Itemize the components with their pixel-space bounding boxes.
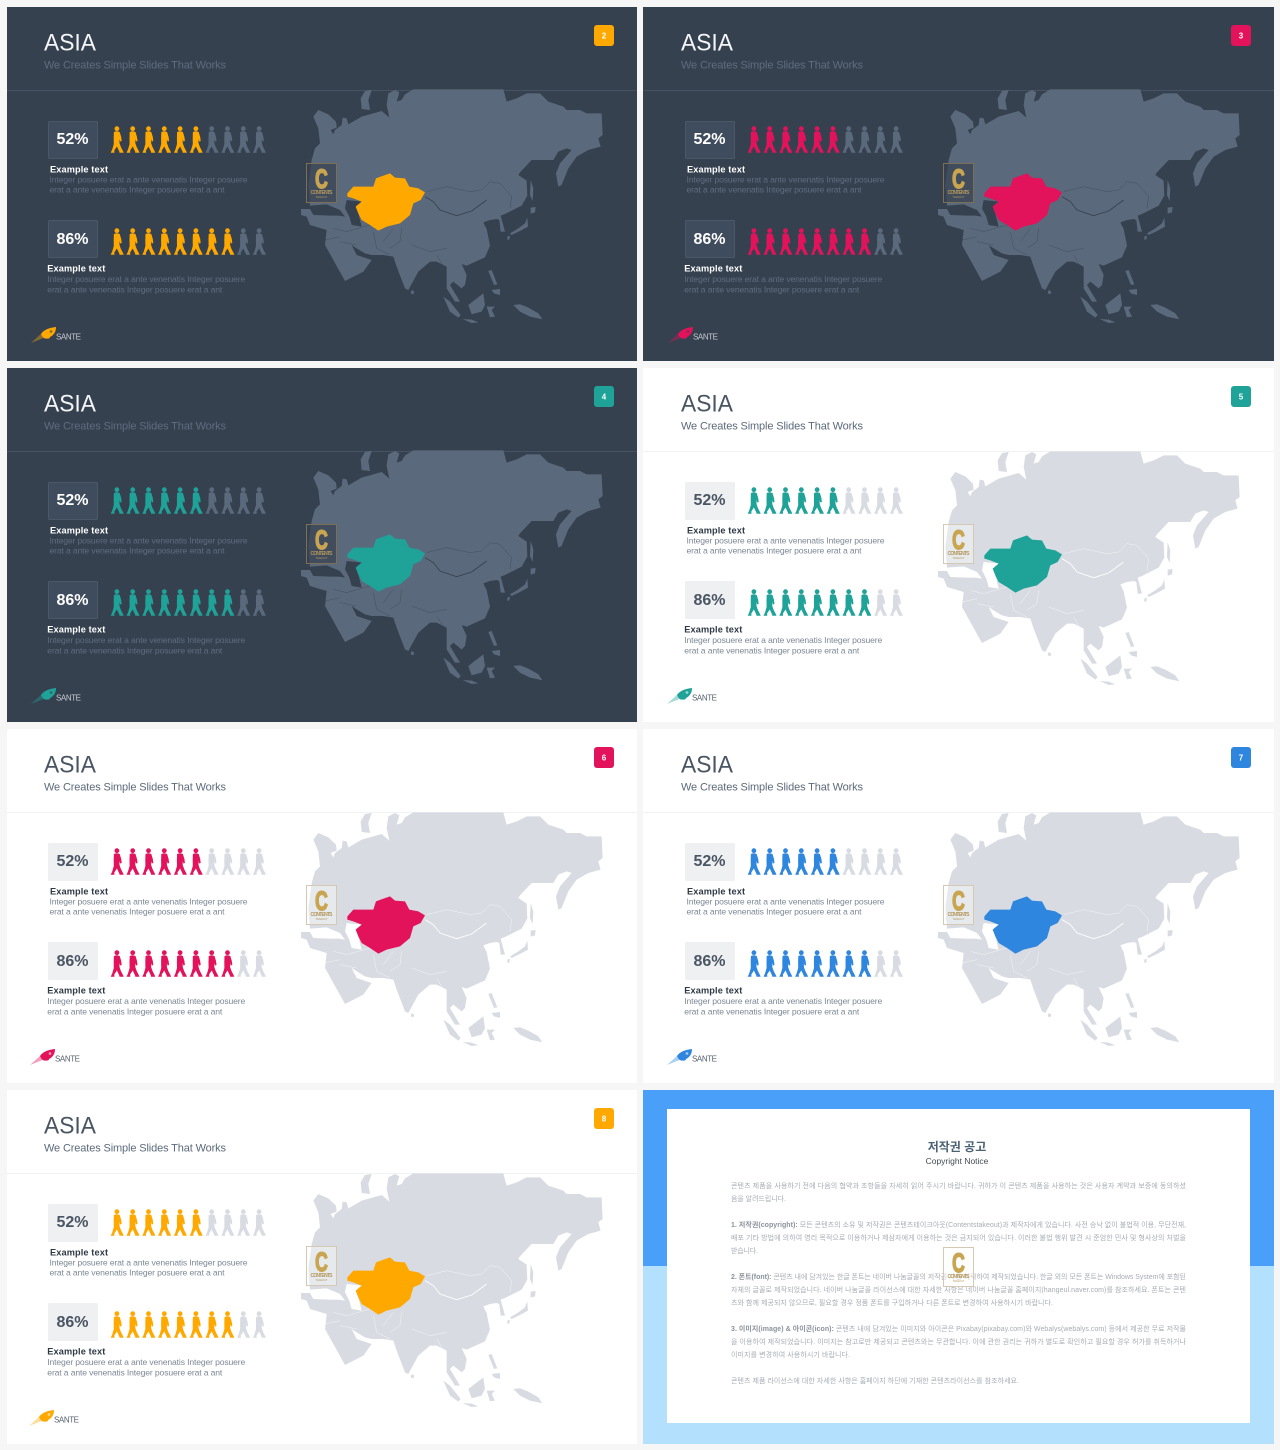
text block 1: Integer posuere erat a ante venenatis Integer posuere <box>50 536 248 546</box>
slide 4: dark teal <box>7 368 637 722</box>
text block 2: erat a ante venenatis Integer posuere erat a ant <box>47 645 223 655</box>
text block 1: Example text <box>50 886 108 896</box>
logo <box>667 688 717 704</box>
notice panel <box>667 1109 1250 1423</box>
page badge: 8 <box>602 1114 607 1124</box>
stat box 52% <box>686 122 734 158</box>
text block 1: erat a ante venenatis Integer posuere erat a ant <box>686 185 862 195</box>
text block 1: Integer posuere erat a ante venenatis Integer posuere <box>50 897 248 907</box>
text block 2: Example text <box>47 625 105 635</box>
stat box 86%: 86% <box>693 953 726 970</box>
slide 3: dark pink <box>643 7 1274 361</box>
map of Asia <box>301 1173 603 1407</box>
stat box 52%: 52% <box>56 1214 89 1231</box>
page badge <box>594 747 614 768</box>
subtitle: We Creates Simple Slides That Works <box>44 781 226 793</box>
stat box 86%: 86% <box>56 231 89 248</box>
text block 2: erat a ante venenatis Integer posuere erat a ant <box>47 284 223 294</box>
text block 2: Integer posuere erat a ante venenatis Integer posuere <box>47 635 246 645</box>
text block 1: Integer posuere erat a ante venenatis Integer posuere <box>686 897 885 907</box>
stat box 52%: 52% <box>56 492 89 509</box>
stat box 52% <box>48 482 98 520</box>
text block 2: erat a ante venenatis Integer posuere erat a ant <box>684 1006 860 1016</box>
watermark <box>944 524 974 564</box>
slide 8: light orange <box>7 1090 637 1444</box>
text block 2: Integer posuere erat a ante venenatis Integer posuere <box>684 996 883 1006</box>
watermark <box>944 885 974 924</box>
text block 2: Example text <box>47 264 105 274</box>
logo: SANTE <box>693 332 718 341</box>
map of Asia <box>938 812 1240 1046</box>
notice body text: 을 이용하여 제작되었습니다. 이미지는 참고로만 제공되고 콘텐츠와는 무관합니다. 이에 관한 권리는 귀하가 별도로 확인하고 필요할 경우 허가를 취득하거나 <box>731 1337 1187 1346</box>
page badge <box>1231 25 1251 46</box>
logo <box>31 688 81 704</box>
text block 1: erat a ante venenatis Integer posuere erat a ant <box>50 1268 225 1278</box>
stat box 52% <box>48 122 98 158</box>
stat box 86% <box>48 942 98 980</box>
stat box 86% <box>48 1304 98 1340</box>
pictogram 86% <box>748 589 903 616</box>
stat box 52% <box>48 844 98 880</box>
watermark <box>306 885 336 924</box>
pictogram 52% <box>111 848 266 875</box>
page badge: 5 <box>1239 392 1244 402</box>
text block 2: Example text <box>684 625 742 635</box>
text block 2: Integer posuere erat a ante venenatis Integer posuere <box>47 274 246 284</box>
text block 1: Example text <box>687 886 745 896</box>
subtitle: We Creates Simple Slides That Works <box>44 59 226 71</box>
page badge <box>594 386 614 407</box>
subtitle: We Creates Simple Slides That Works <box>681 781 864 793</box>
text block 2: erat a ante venenatis Integer posuere erat a ant <box>684 284 860 294</box>
stat box 52%: 52% <box>693 131 726 148</box>
notice body text: 이미지를 변경하여 사용하시기 바랍니다. <box>731 1350 850 1359</box>
logo <box>667 1049 717 1065</box>
watermark <box>306 524 336 564</box>
text block 2: erat a ante venenatis Integer posuere erat a ant <box>684 645 860 655</box>
notice body text: 콘텐츠 제품을 사용하기 전에 다음의 협약과 조항들을 자세히 읽어 주시기 바랍니다. 귀하가 이 콘텐츠 제품을 사용하는 것은 사용자 계약과 보증에 동의하셨 <box>731 1181 1187 1190</box>
stat box 86%: 86% <box>56 592 89 609</box>
text block 2: Integer posuere erat a ante venenatis Integer posuere <box>47 996 246 1006</box>
pictogram 52% <box>111 126 266 153</box>
text block 2 <box>47 1347 246 1377</box>
stat box 86%: 86% <box>693 231 726 248</box>
logo <box>31 327 81 343</box>
subtitle: We Creates Simple Slides That Works <box>44 420 226 432</box>
notice body text: 음을 알려드립니다. <box>731 1194 786 1203</box>
stat box 86%: 86% <box>56 953 89 970</box>
text block 1: Integer posuere erat a ante venenatis Integer posuere <box>50 1258 248 1268</box>
text block 1 <box>50 1247 248 1278</box>
stat box 86% <box>48 582 98 618</box>
text block 2 <box>47 986 246 1016</box>
notice body text: 받습니다. <box>731 1246 758 1255</box>
pictogram 52% <box>748 487 903 514</box>
text block 2 <box>684 625 883 655</box>
notice body text: 2. 폰트(font): 콘텐츠 내에 담겨있는 한글 폰트는 네이버 나눔글꼴의 저작권 사용 허락하여 제작되었습니다. 한글 외의 모든 폰트는 Windows System에 포함된 <box>731 1272 1186 1281</box>
page badge: 2 <box>602 32 607 40</box>
stat box 86% <box>686 582 734 618</box>
page badge <box>1231 747 1251 768</box>
pictogram 52% <box>748 848 903 875</box>
title: ASIA <box>44 752 96 778</box>
page badge <box>594 1108 614 1129</box>
subtitle: We Creates Simple Slides That Works <box>44 1142 226 1154</box>
stat box 86% <box>686 220 734 258</box>
logo: SANTE <box>56 332 81 341</box>
watermark <box>944 1247 974 1286</box>
title: ASIA <box>681 390 733 418</box>
text block 1 <box>50 164 248 195</box>
text block 1: erat a ante venenatis Integer posuere erat a ant <box>50 185 225 195</box>
pictogram 86% <box>748 950 903 977</box>
slide 9: copyright notice <box>643 1090 1274 1444</box>
text block 1: Example text <box>687 164 745 174</box>
slide 2: dark orange <box>7 7 637 361</box>
pictogram 52% <box>111 487 266 514</box>
notice heading: 저작권 공고 <box>928 1139 986 1154</box>
text block 1: Integer posuere erat a ante venenatis Integer posuere <box>50 175 248 185</box>
page badge: 7 <box>1239 754 1244 762</box>
pictogram 52% <box>111 1209 266 1236</box>
watermark <box>306 1246 336 1286</box>
notice body text: 츠와 함께 제공되지 않으므로, 필요할 경우 정품 폰트를 구입하거나 다른 폰트로 변경하여 사용하시기 바랍니다. <box>731 1298 1053 1307</box>
notice body text: 배포 기타 방법에 의하여 영리 목적으로 이용하거나 제삼자에게 이용하는 것은 금지되어 있습니다. 이러한 불법 행위 발견 시 준엄한 민사 및 형사상의 처벌을 <box>731 1233 1187 1242</box>
text block 1: Example text <box>50 164 108 174</box>
logo <box>668 327 718 343</box>
notice body text <box>731 1181 1187 1385</box>
text block 2: Example text <box>47 986 105 996</box>
text block 2: Integer posuere erat a ante venenatis Integer posuere <box>684 635 883 645</box>
subtitle: We Creates Simple Slides That Works <box>681 59 864 71</box>
title: ASIA <box>44 390 96 418</box>
stat box 86% <box>686 942 734 980</box>
text block 1: Integer posuere erat a ante venenatis Integer posuere <box>686 536 885 546</box>
logo: SANTE <box>692 693 717 702</box>
pictogram 86% <box>111 1311 266 1338</box>
page badge: 3 <box>1239 32 1244 40</box>
text block 2: Example text <box>684 264 742 274</box>
title: ASIA <box>44 1112 96 1140</box>
text block 1 <box>686 886 885 917</box>
map of Asia <box>938 451 1240 685</box>
pictogram 86% <box>748 228 903 255</box>
text block 1: Example text <box>50 1247 108 1257</box>
pictogram 86% <box>111 950 266 977</box>
map of Asia <box>301 450 603 684</box>
stat box 86% <box>48 220 98 258</box>
text block 2: Integer posuere erat a ante venenatis Integer posuere <box>47 1357 246 1367</box>
logo <box>29 1410 79 1426</box>
logo: SANTE <box>692 1054 717 1063</box>
text block 1: erat a ante venenatis Integer posuere erat a ant <box>686 907 862 917</box>
watermark <box>306 163 336 202</box>
page badge: 6 <box>602 754 607 762</box>
text block 2: Example text <box>684 986 742 996</box>
page badge <box>594 25 614 46</box>
text block 2 <box>47 264 246 294</box>
stat box 52%: 52% <box>56 853 89 870</box>
logo <box>30 1049 80 1065</box>
text block 1: Example text <box>687 525 745 535</box>
watermark <box>944 163 974 202</box>
text block 1: erat a ante venenatis Integer posuere erat a ant <box>50 907 225 917</box>
pictogram 86% <box>111 228 266 255</box>
text block 1 <box>50 886 248 917</box>
stat box 52% <box>48 1204 98 1242</box>
notice body text: 3. 이미지(image) & 아이콘(icon): 콘텐츠 내에 담겨있는 이미지와 아이콘은 Pixabay(pixabay.com)와 Webalys(webalys.com) 등에서 제공한 무료 저작물 <box>731 1324 1187 1333</box>
title: ASIA <box>44 30 96 56</box>
notice body text: 1. 저작권(copyright): 모든 콘텐츠의 소유 및 저작권은 콘텐츠테이크아웃(Contentstakeout)과 제작자에게 있습니다. 사전 승낙 없이 불법적 이용, 무단전재, <box>731 1220 1186 1229</box>
slide 7: light blue <box>643 729 1274 1083</box>
text block 2 <box>684 986 883 1016</box>
stat box 52%: 52% <box>56 131 89 148</box>
text block 1 <box>686 525 885 556</box>
text block 1 <box>686 164 885 195</box>
map of Asia <box>301 89 603 323</box>
text block 1: erat a ante venenatis Integer posuere erat a ant <box>686 546 862 556</box>
stat box 52% <box>686 482 734 520</box>
text block 1 <box>50 525 248 556</box>
subtitle: We Creates Simple Slides That Works <box>681 420 864 432</box>
notice body text: 자체의 글꼴로 제작되었습니다. 네이버 나눔글꼴 라이선스에 대한 자세한 사항은 네이버 나눔글꼴 홈페이지(hangeul.naver.com)를 참조하세요. 폰트는 콘텐 <box>731 1285 1186 1294</box>
text block 2: erat a ante venenatis Integer posuere erat a ant <box>47 1006 223 1016</box>
title: ASIA <box>681 30 733 56</box>
text block 1: erat a ante venenatis Integer posuere erat a ant <box>50 546 225 556</box>
map of Asia <box>301 812 603 1046</box>
text block 2: erat a ante venenatis Integer posuere erat a ant <box>47 1367 223 1377</box>
slide 6: light pink <box>7 729 637 1083</box>
logo: SANTE <box>54 1415 79 1424</box>
slide 5: light teal <box>643 368 1274 722</box>
notice subheading: Copyright Notice <box>926 1156 989 1166</box>
title: ASIA <box>681 752 733 778</box>
logo: SANTE <box>55 1054 80 1063</box>
page badge: 4 <box>602 392 607 402</box>
stat box 86%: 86% <box>693 592 726 609</box>
stat box 52%: 52% <box>693 853 726 870</box>
pictogram 52% <box>748 126 903 153</box>
notice body text: 콘텐츠 제품 라이선스에 대한 자세한 사항은 홈페이지 하단에 기재한 콘텐츠라이선스를 참조하세요. <box>731 1376 1019 1385</box>
text block 2: Integer posuere erat a ante venenatis Integer posuere <box>684 274 883 284</box>
text block 2: Example text <box>47 1347 105 1357</box>
map of Asia <box>938 89 1240 323</box>
text block 1: Example text <box>50 525 108 535</box>
pictogram 86% <box>111 589 266 616</box>
stat box 52%: 52% <box>693 492 726 509</box>
stat box 86%: 86% <box>56 1314 89 1331</box>
text block 1: Integer posuere erat a ante venenatis Integer posuere <box>686 175 885 185</box>
text block 2 <box>684 264 883 294</box>
text block 2 <box>47 625 246 655</box>
stat box 52% <box>686 844 734 880</box>
logo: SANTE <box>56 693 81 702</box>
page badge <box>1231 386 1251 407</box>
